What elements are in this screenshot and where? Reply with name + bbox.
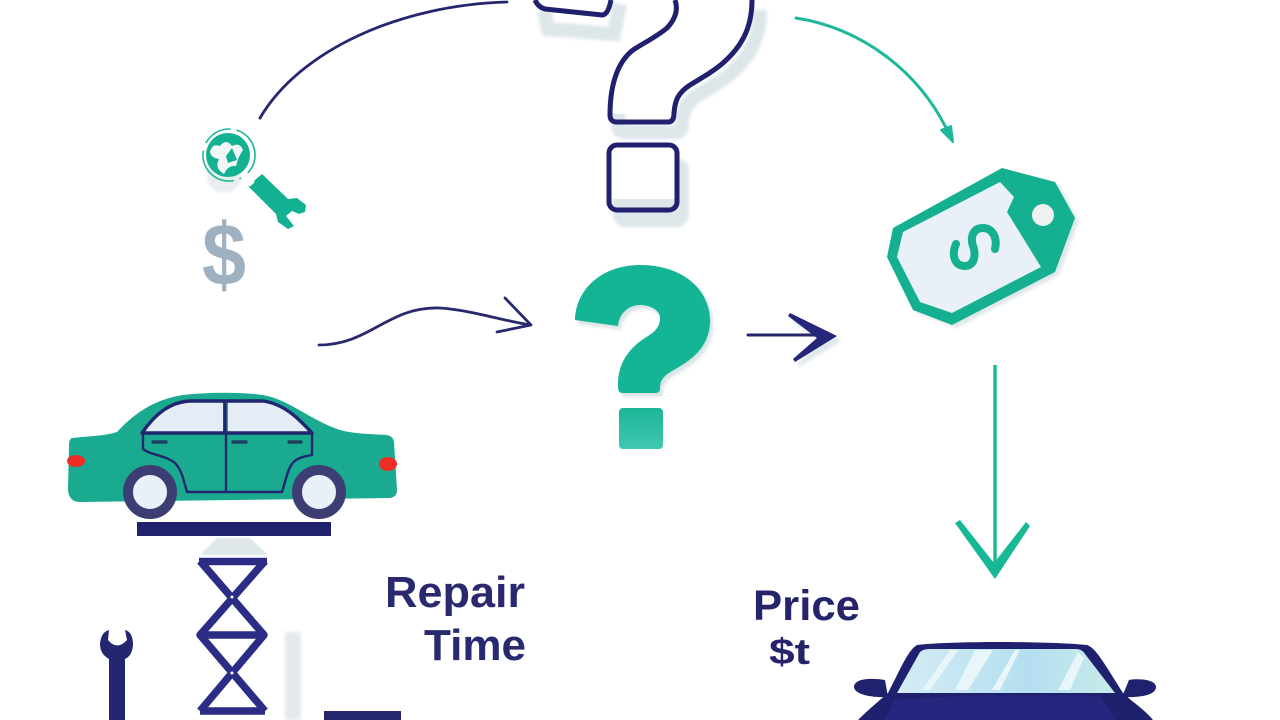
navy car front: [854, 642, 1156, 720]
tail lights: [67, 455, 85, 467]
scissor lift: [137, 522, 331, 711]
windows: [142, 402, 312, 432]
label: repair time: Repair: [385, 568, 525, 617]
curved arrow: question mark to price tag: [796, 18, 953, 142]
car body: [68, 393, 397, 502]
lift connector: [200, 538, 268, 555]
label: price: Price: [753, 582, 860, 630]
label: price: [753, 582, 860, 672]
green car on lift: [67, 393, 397, 514]
lift platform: [137, 522, 331, 536]
label: price: $t: [769, 631, 810, 672]
arrow: price tag down to car: [955, 365, 1030, 579]
arrow: question mark to price tag: [748, 313, 841, 367]
door handles: [153, 440, 301, 444]
arrow: car to question mark: [319, 298, 531, 345]
green filled question mark: [575, 265, 713, 449]
outlined question mark: [535, 0, 760, 220]
scissor arms: [199, 561, 267, 711]
icon: green wrench: [203, 129, 306, 229]
label: repair time: Time: [424, 621, 526, 670]
icon: navy wrench: [100, 630, 133, 720]
interior of question mark: [610, 0, 752, 114]
windshield streaks: [922, 650, 1084, 690]
dollar mark on tag: [954, 228, 996, 266]
roof and body: [858, 642, 1153, 720]
icon: grey dollar sign: $: [202, 205, 246, 304]
hood highlight: [885, 695, 1115, 720]
mirrors: [854, 679, 1156, 697]
icon: price tag: [887, 168, 1079, 328]
curved arrow: wrench to question mark: [260, 2, 507, 118]
navy block: [324, 711, 401, 720]
faint grey tool column: [285, 632, 301, 720]
wheels: [128, 470, 172, 514]
windshield: [897, 649, 1115, 693]
label: repair time: [385, 568, 526, 670]
